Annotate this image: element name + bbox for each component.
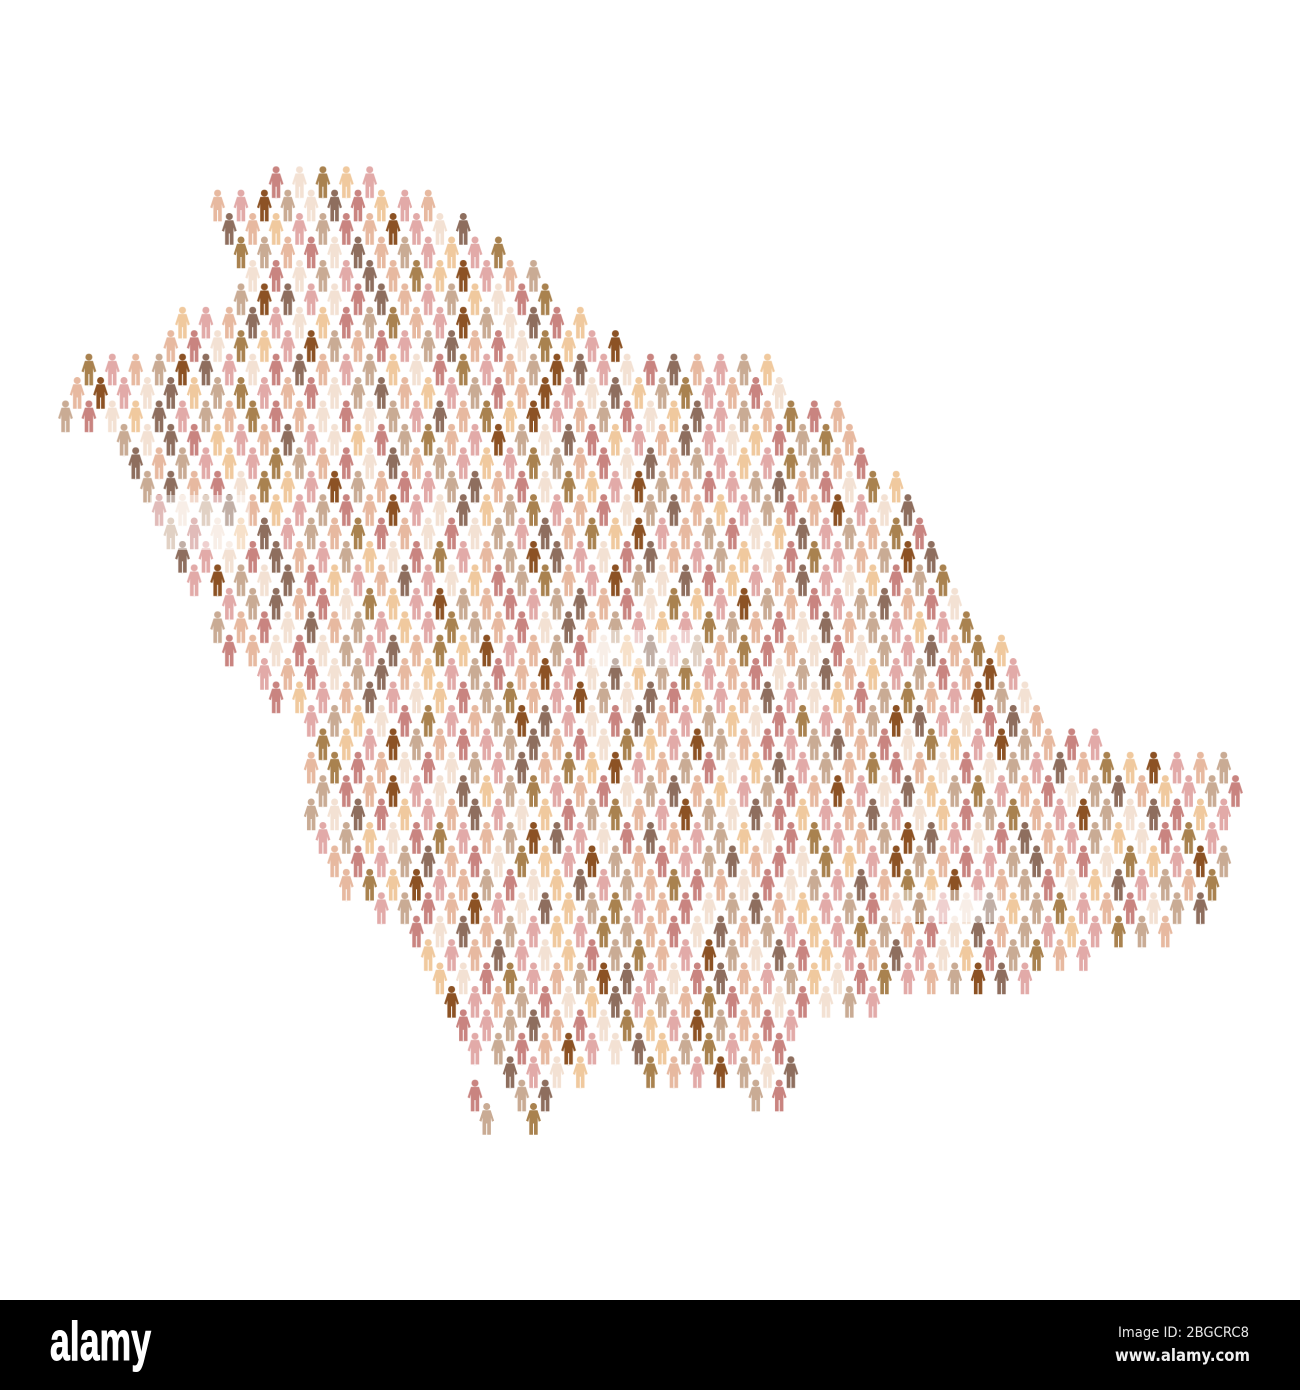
map of Saudi Arabia made of people figures — [54, 166, 1247, 1135]
image id: Image ID: 2BGCRC8 — [1118, 1325, 1249, 1341]
footer bar — [0, 1300, 1300, 1390]
alamy logo: alamy — [50, 1310, 151, 1372]
website: www.alamy.com — [1115, 1346, 1250, 1366]
faded watermark patches over the map — [150, 495, 1000, 922]
